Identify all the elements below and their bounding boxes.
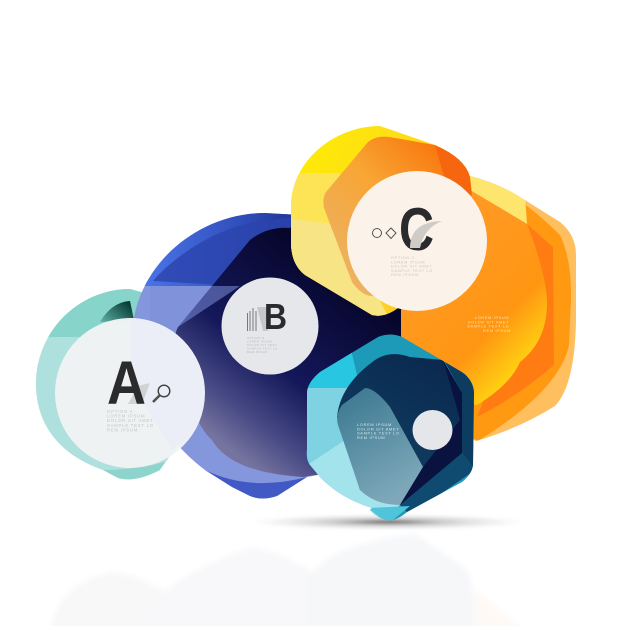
ground shadow xyxy=(250,514,526,530)
teal hexagon panel xyxy=(306,334,474,520)
caption A: REM IPSUM xyxy=(107,427,138,432)
caption C: SAMPLE TEXT LO xyxy=(391,269,433,273)
icon: circle and diamond xyxy=(372,228,396,238)
caption B: SAMPLE TEXT LO xyxy=(247,346,278,350)
caption B: LOREM IPSUM xyxy=(247,340,272,344)
orange shape xyxy=(395,170,580,445)
C shadow xyxy=(410,221,442,248)
circle A panel xyxy=(55,318,205,468)
blue shape B xyxy=(134,213,402,498)
letter C: C xyxy=(399,196,434,263)
hexagon caption: LOREM IPSUM xyxy=(357,422,392,427)
hexagon caption: DOLOR SIT AMET xyxy=(357,426,399,431)
caption C: REM IPSUM xyxy=(391,273,419,277)
infographic canvas xyxy=(36,126,576,626)
circle B panel xyxy=(222,278,318,374)
reflection of shapes xyxy=(50,534,525,626)
caption B: REM IPSUM xyxy=(247,350,268,354)
hexagon caption: REM IPSUM xyxy=(357,435,385,440)
hexagon caption: SAMPLE TEXT LO xyxy=(357,431,400,436)
letter B: B xyxy=(264,296,287,337)
teal shape A xyxy=(36,289,170,480)
caption B: DOLOR SIT AMET xyxy=(247,343,277,347)
caption A: LOREM IPSUM xyxy=(107,414,145,419)
caption A: DOLOR SIT AMET xyxy=(107,418,153,423)
circle C panel xyxy=(347,171,487,311)
caption A: OPTION A xyxy=(107,409,133,414)
orange caption: SAMPLE TEXT LO xyxy=(467,325,509,329)
orange caption: LOREM IPSUM xyxy=(475,316,509,320)
A shadow xyxy=(128,383,150,404)
icon: magnifier xyxy=(153,385,170,402)
letter A: A xyxy=(107,349,146,417)
B shadow xyxy=(257,307,268,331)
caption C: OPTION C xyxy=(391,256,415,260)
hexagon dot xyxy=(412,410,452,450)
caption C: DOLOR SIT AMET xyxy=(391,265,433,269)
caption B: OPTION B xyxy=(247,336,264,340)
caption C: LOREM IPSUM xyxy=(391,260,425,264)
orange caption: REM IPSUM xyxy=(483,329,511,333)
yellow shape xyxy=(291,126,472,316)
caption A: SAMPLE TEXT LO xyxy=(107,423,154,428)
icon: bars xyxy=(248,308,256,331)
orange caption: DOLOR SIT AMET xyxy=(468,320,509,324)
